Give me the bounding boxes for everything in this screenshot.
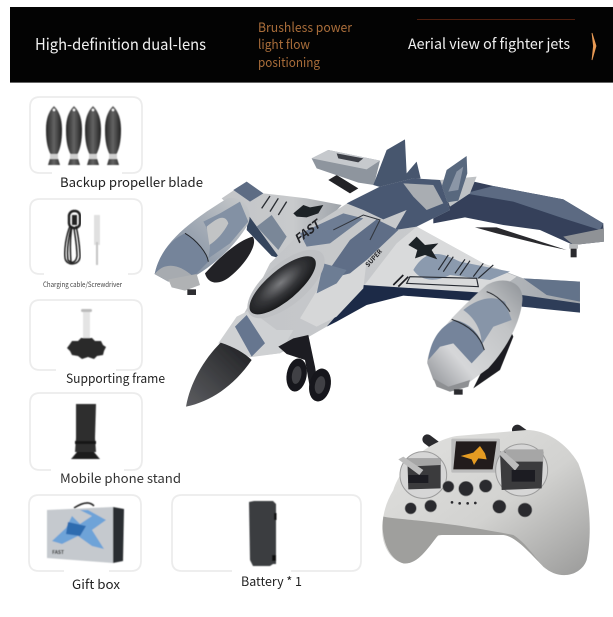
left gimbal: [398, 452, 447, 498]
illustration: remote controller: [382, 430, 590, 575]
wing emblems: [293, 205, 438, 259]
heading: high-definition dual-lens: High-definition dual-lens: [35, 31, 206, 55]
controller body: [382, 430, 590, 575]
left engine pod: [155, 198, 250, 295]
right gimbal: [496, 444, 548, 496]
icon: usb cable: [65, 211, 80, 264]
front landing gear: [278, 335, 334, 403]
text block: brushless power light flow positioning: light flow: [258, 34, 311, 53]
label: Supporting frame: [66, 368, 165, 387]
main fuselage: SUPER: [363, 246, 384, 269]
icon: orange arrow: [592, 33, 596, 60]
label: Backup propeller blade: [60, 172, 203, 191]
right engine pod: [427, 280, 523, 395]
camera module: [312, 150, 380, 193]
shoulder stick left: [427, 439, 435, 445]
nose cone: [186, 343, 252, 407]
button group: [405, 480, 532, 517]
label: Mobile phone stand: [60, 468, 181, 487]
header banner: [10, 7, 613, 83]
panel: battery: [172, 495, 361, 590]
shoulder stick right: [517, 430, 527, 437]
stencil markings: [407, 277, 478, 287]
blue camo patches: [347, 178, 450, 230]
rear right wing: [433, 177, 604, 257]
icon: battery: [249, 501, 276, 566]
icon: orange plane on screen: [461, 446, 487, 465]
label: Battery * 1: [241, 571, 302, 590]
rear left wing: [222, 182, 342, 258]
icon: four propeller blades: [46, 106, 121, 165]
left wing vents: [262, 196, 287, 215]
label: Gift box: [72, 574, 121, 593]
tail fins: [373, 139, 467, 204]
display: [451, 439, 500, 473]
text block: brushless power light flow positioning: positioning: [258, 52, 321, 71]
panel: supporting frame: [30, 300, 165, 387]
cockpit intake: [236, 238, 336, 330]
accent line: [417, 19, 575, 20]
bright wing surface: [363, 227, 517, 293]
main fuselage: [218, 178, 580, 357]
label: Charging cable/Screwdriver: [43, 280, 122, 290]
panel: mobile phone stand: [30, 393, 181, 487]
icon: supporting stand: [67, 309, 106, 359]
text block: brushless power light flow positioning: [258, 17, 353, 71]
panel: gift box: [29, 495, 141, 593]
icon: phone holder: [71, 404, 100, 459]
fuselage text: FAST: [290, 214, 325, 247]
lower nose section: [218, 310, 293, 357]
icon: gift box: FAST: [52, 549, 64, 556]
panel: backup propeller blade: [30, 97, 203, 191]
heading: aerial view of fighter jets: Aerial view of fighter jets: [408, 33, 570, 54]
text block: brushless power light flow positioning: Brushless power: [258, 17, 353, 36]
panel: charging cable and screwdriver: [30, 199, 142, 290]
icon: screwdriver: [94, 215, 100, 265]
rear left propeller: [205, 237, 254, 283]
illustration: fighter jet drone: [155, 139, 604, 407]
